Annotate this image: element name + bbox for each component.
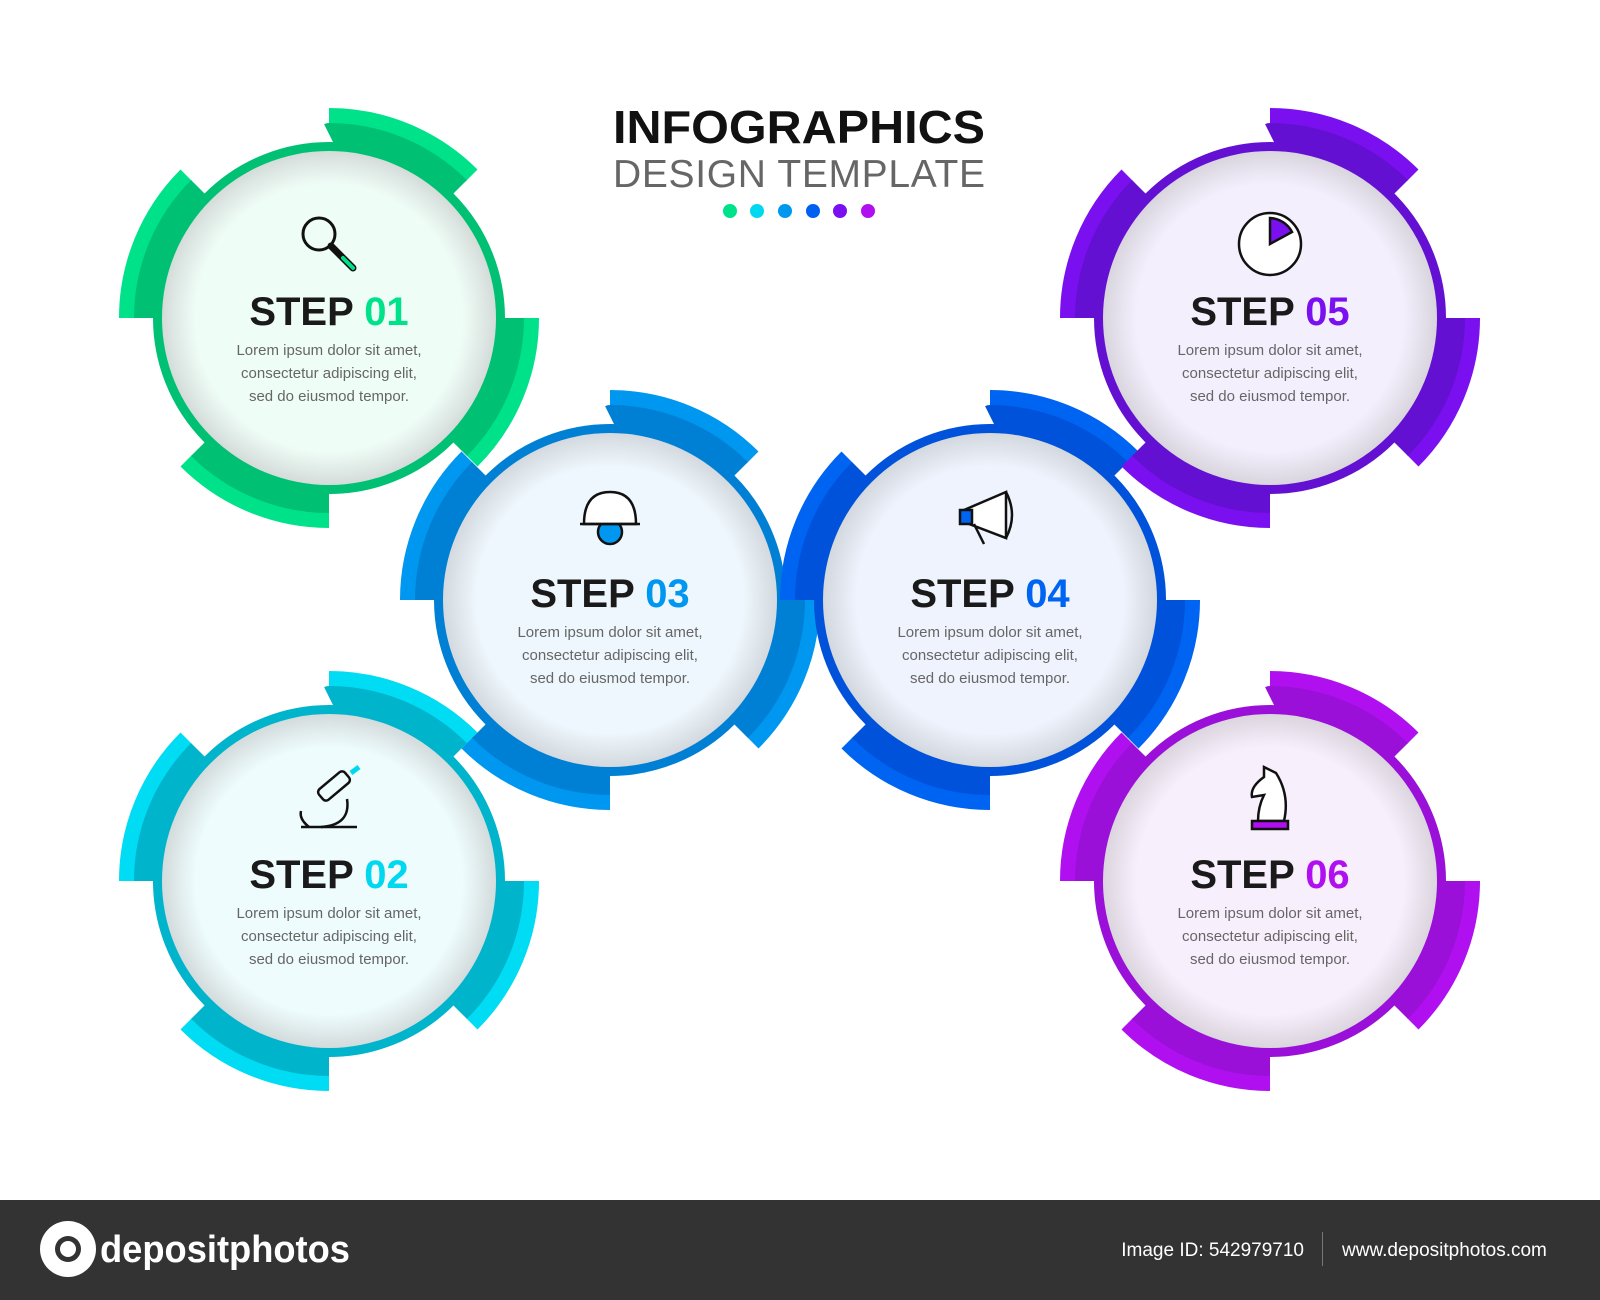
icon: microscope [301, 767, 359, 827]
icon: helmet gear [580, 492, 640, 544]
panel: step 05: Lorem ipsum dolor sit amet, [1177, 342, 1363, 359]
panel: step 05: consectetur adipiscing elit, [1182, 365, 1358, 382]
panel: step 02 [127, 679, 531, 1083]
panel: step 05 [1068, 116, 1472, 520]
panel: step 02: consectetur adipiscing elit, [241, 928, 417, 945]
panel: step 03: STEP 03 [530, 572, 690, 616]
panel: step 04: sed do eiusmod tempor. [910, 670, 1070, 687]
panel: step 04: STEP 04 [910, 572, 1070, 616]
panel: step 03: sed do eiusmod tempor. [530, 670, 690, 687]
panel: step 02: sed do eiusmod tempor. [249, 951, 409, 968]
footer bar [0, 1200, 1600, 1300]
title: DESIGN TEMPLATE [613, 153, 985, 196]
panel: step 02: Lorem ipsum dolor sit amet, [236, 905, 422, 922]
icon: chess knight [1252, 767, 1288, 829]
panel: step 02: STEP 02 [249, 853, 409, 897]
icon: camera logo [40, 1221, 96, 1277]
icon: megaphone [960, 492, 1012, 544]
panel: step 03 [408, 398, 812, 802]
panel: step 01: Lorem ipsum dolor sit amet, [236, 342, 422, 359]
panel: step 01: sed do eiusmod tempor. [249, 388, 409, 405]
title: INFOGRAPHICS [613, 101, 985, 153]
panel: step 05: sed do eiusmod tempor. [1190, 388, 1350, 405]
footer bar: Image ID: 542979710 [1121, 1240, 1304, 1261]
panel: step 01: consectetur adipiscing elit, [241, 365, 417, 382]
icon: clock [1239, 213, 1301, 275]
panel: step 04: consectetur adipiscing elit, [902, 647, 1078, 664]
icon: magnifier [303, 218, 353, 268]
panel: step 01: STEP 01 [249, 290, 409, 334]
panel: step 06 [1068, 679, 1472, 1083]
color dots [723, 204, 875, 218]
panel: step 06: sed do eiusmod tempor. [1190, 951, 1350, 968]
panel: step 03: consectetur adipiscing elit, [522, 647, 698, 664]
title [613, 101, 985, 196]
panel: step 06: STEP 06 [1190, 853, 1350, 897]
panel: step 06: Lorem ipsum dolor sit amet, [1177, 905, 1363, 922]
panel: step 03: Lorem ipsum dolor sit amet, [517, 624, 703, 641]
panel: step 05: STEP 05 [1190, 290, 1350, 334]
panel: step 01 [127, 116, 531, 520]
footer bar: www.depositphotos.com [1341, 1240, 1547, 1261]
panel: step 06: consectetur adipiscing elit, [1182, 928, 1358, 945]
footer bar: depositphotos [100, 1229, 350, 1271]
panel: step 04 [788, 398, 1192, 802]
panel: step 04: Lorem ipsum dolor sit amet, [897, 624, 1083, 641]
